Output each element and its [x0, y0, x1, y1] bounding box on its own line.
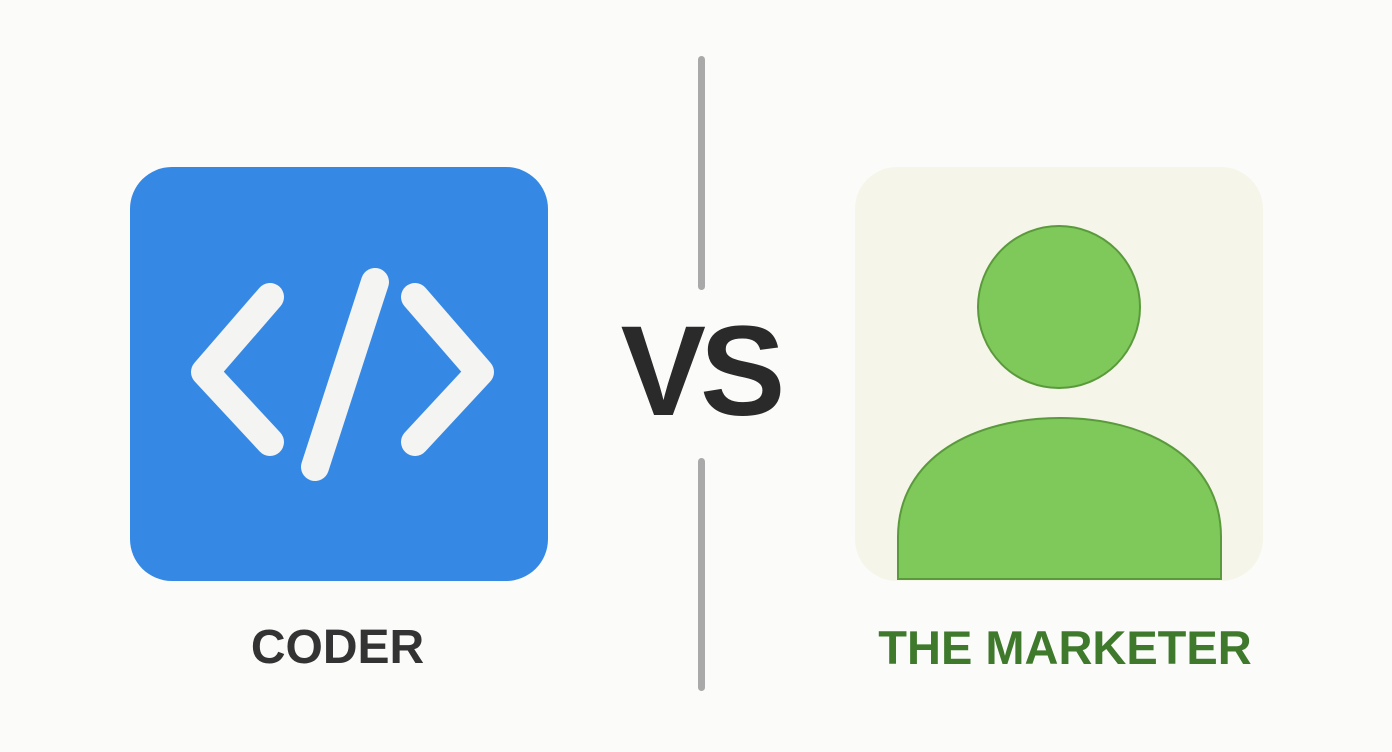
vs text: VS: [621, 300, 779, 443]
panel: marketer icon: [855, 167, 1263, 581]
label: coder: CODER: [251, 621, 424, 674]
divider top: [698, 56, 705, 290]
divider bottom: [698, 458, 705, 691]
panel: coder icon: [130, 167, 548, 581]
label: the marketer: THE MARKETER: [878, 621, 1252, 674]
icon: code brackets: [191, 268, 494, 481]
icon: person: [897, 225, 1222, 580]
